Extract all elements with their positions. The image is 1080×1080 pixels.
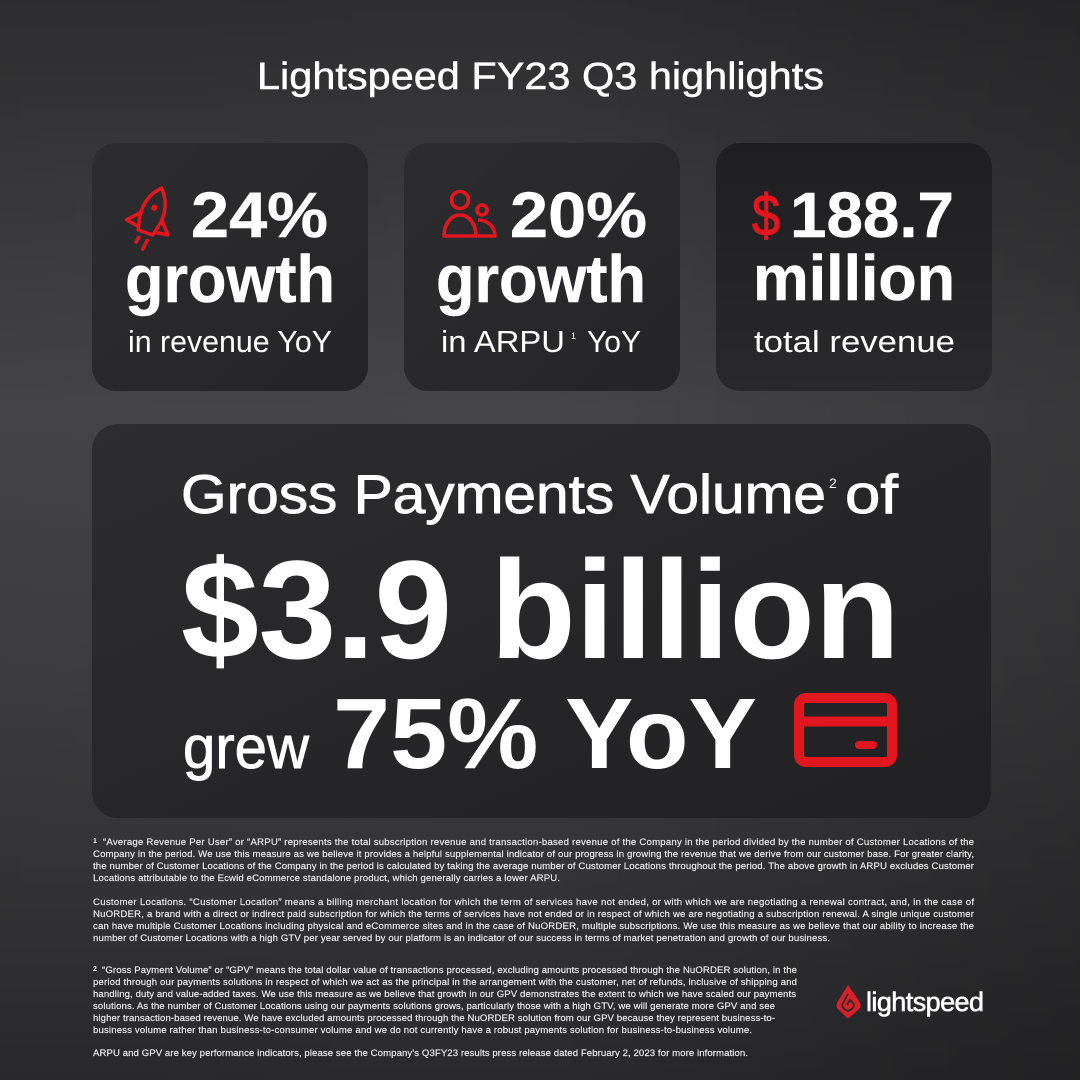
- footnote: key performance indicators: ARPU and GPV are key performance indicators, please see the Company’s Q3FY23 results press release dated February 2, 2023 for more information.: [93, 1048, 748, 1059]
- panel: ARPU growth: [404, 143, 680, 391]
- footnote: customer locations: [93, 897, 975, 944]
- stat: 75% YoY: 75% YoY: [333, 678, 757, 790]
- panel: total revenue: [716, 143, 992, 391]
- footnote: ARPU definition: [93, 837, 975, 884]
- footnote: ARPU definition: Locations attributable to the Ecwid eCommerce standalone product, which generally carries a lower ARPU.: [93, 873, 560, 884]
- big number: $3.9 billion: $3.9 billion: [181, 531, 900, 688]
- icon: rocket: [119, 181, 182, 256]
- caption: in ARPU YoY: YoY: [587, 324, 641, 359]
- stat label: growth: growth: [436, 242, 646, 317]
- footnote: customer locations: NuORDER, a brand with a direct or indirect paid subscription for which the terms of services have not ended or in respect of which we are negotiating a subscription renewal. A single unique customer: [93, 909, 975, 920]
- footnote: customer locations: Customer Locations. “Customer Location” means a billing merchant location for which the term of services have not ended, or with which we are negotiating a renewal contract, and, in the case of: [93, 897, 974, 908]
- heading: gross payments volume of: Gross Payments Volume: [181, 463, 826, 525]
- stat: 20%: 20%: [510, 179, 647, 251]
- footnote: GPV definition: 2: [93, 966, 97, 973]
- caption: in revenue YoY: in revenue YoY: [128, 324, 332, 359]
- footnote: GPV definition: handling, duty and value-added taxes. We use this measure as we believe that growth in our GPV demonstrates the extent to which we have scaled our payments: [93, 989, 796, 1000]
- stat: 24%: 24%: [191, 179, 328, 251]
- stat: 188.7: 188.7: [790, 179, 954, 251]
- footnote: ARPU definition: Company in the period. We use this measure as we believe it provides a helpful supplemental indicator of our progress in growing the revenue that we derive from our customer base. For greater clarity,: [93, 849, 974, 860]
- footnote: GPV definition: [93, 965, 797, 1036]
- icon: dollar sign: $: [752, 183, 780, 248]
- icon: credit card: [799, 698, 892, 762]
- panel: gross payments volume: [92, 424, 991, 818]
- footnote: GPV definition: higher transaction-based revenue. We have excluded amounts processed through the NuORDER solution from our GPV because they represent business-to-: [93, 1013, 775, 1024]
- footnote: ARPU definition: “Average Revenue Per User” or “ARPU” represents the total subscription revenue and transaction-based revenue of the Company in the period divided by the number of Customer Locations of the: [103, 837, 974, 848]
- footnote: GPV definition: “Gross Payment Volume” or “GPV” means the total dollar value of transactions processed, excluding amounts processed through the NuORDER solution, in the: [102, 965, 797, 976]
- footnote: GPV definition: period through our payments solutions in respect of which we act as the principal in the arrangement with the customer, net of refunds, inclusive of shipping and: [93, 977, 797, 988]
- footnote: GPV definition: business volume rather than business-to-consumer volume and we do not currently have a robust payments solution for business-to-business volume.: [93, 1025, 752, 1036]
- logo: lightspeed: [836, 985, 984, 1018]
- caption: in ARPU YoY: [441, 324, 641, 359]
- footnote: ARPU definition: 1: [93, 838, 97, 845]
- footnote: customer locations: number of Customer Locations with a high GTV per year served by our platform is an indicator of our success in terms of market penetration and growth of our business.: [93, 933, 830, 944]
- stat label: growth: growth: [125, 242, 335, 317]
- panel: revenue growth: [92, 143, 368, 391]
- caption: total revenue: total revenue: [754, 324, 955, 359]
- caption: in ARPU YoY: 1: [571, 331, 576, 341]
- text: grew: grew: [183, 714, 310, 781]
- icon: people: [444, 192, 495, 236]
- footnote: GPV definition: solutions. As the number of Customer Locations using our payments solutions grows, particularly those with a high GTV, we will generate more GPV and see: [93, 1001, 775, 1012]
- heading: gross payments volume of: of: [845, 463, 899, 525]
- stat label: million: million: [753, 242, 955, 314]
- wordmark: lightspeed: [866, 987, 984, 1017]
- footnote: ARPU definition: the number of Customer Locations of the Company in the period is calculated by taking the average number of Customer Locations throughout the period. The above growth in ARPU excludes Customer: [93, 861, 975, 872]
- heading: gross payments volume of: 2: [829, 475, 837, 491]
- footnote: customer locations: can have multiple Customer Locations including physical and eCommerce sites and in the case of NuORDER, multiple subscriptions. We use this measure as we believe that our ability to increase the: [93, 921, 974, 932]
- caption: in ARPU YoY: in ARPU: [441, 324, 565, 359]
- title: Lightspeed FY23 Q3 highlights: [257, 56, 824, 98]
- icon: flame: [836, 985, 860, 1018]
